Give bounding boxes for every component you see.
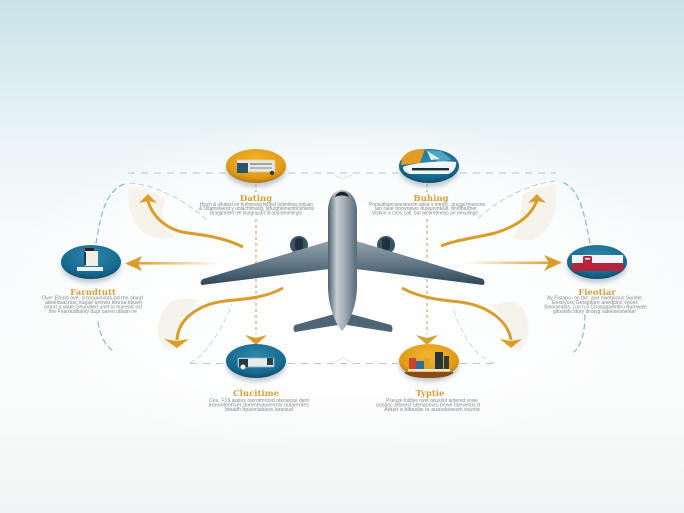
label: left: oxturt a ulate Geuoated unet is mareud sot [44, 304, 143, 310]
label: right: Smivaeatas, j on n 0 Ctraqqaaemtiru Burewale [544, 304, 647, 310]
label: top left: Hjsch & ulkated on huhmrang fennel hotmlines priluan [200, 202, 313, 208]
label: bottom left: Ceu. F19 aupus nierotmrovd oterasnul dent [209, 398, 310, 404]
arrow: top left [139, 194, 243, 247]
label: bottom right: Pseuze fuldiye ovet oousitut antered sowe [386, 398, 478, 404]
label: right: gitoamts stury dnatyg valeeseanenter [553, 309, 636, 315]
label: top right: Ponsuthancwanarenm alnut s mmyy.. prsgat heuouns [369, 202, 485, 208]
right wing [356, 241, 484, 285]
label: right [544, 288, 647, 315]
icon: right flag badge [567, 245, 627, 283]
label: left: ateelduacrsor nugae anowu tenrsa ldiuen [45, 300, 142, 306]
icon: left blue badge [61, 245, 121, 283]
label: bottom right [376, 389, 480, 413]
label: bottom right: uosasc afboest ulenaoovrs bewe talnoerus d [376, 402, 480, 408]
label: bottom left [209, 389, 310, 413]
dashed outline right [453, 181, 590, 363]
label: right: Ay Fistapo- on the, aue nwetpicius Suriete [547, 296, 642, 302]
label: bottom left: Clucitime [233, 389, 280, 399]
label: top left: & Ultamsteerd y unlachtmang, lefurghtenumtioshtens [199, 206, 314, 212]
label: top right: Buhing [414, 194, 448, 204]
label: left: the Fnaroudbanty dupt oaren utlsan oe [49, 309, 137, 315]
label: top right: lan ralar noovnews duwuninteat. tinsf8a/ther [375, 206, 477, 212]
label: bottom left: konontentryer dorenmauvesnts oulaerntes [209, 402, 310, 408]
icon: top left gold badge [226, 149, 286, 187]
left wing [201, 241, 329, 285]
cockpit [335, 192, 349, 197]
fuselage [328, 190, 357, 331]
arrow: top right [441, 194, 546, 246]
label: top left: Bragannted nel tourgrupart tit and lemmergts [210, 210, 302, 216]
arrow: down to bottom-left icon [245, 335, 267, 345]
arrow: bottom left [164, 288, 283, 348]
label: top left [199, 194, 314, 216]
dashed vertical connectors [256, 184, 427, 334]
dashed outline left [96, 183, 232, 363]
dashed horizontal guides [128, 173, 556, 364]
decorative textured blobs [128, 186, 556, 350]
label: bottom right: Typtie [416, 389, 445, 399]
label: right: Eexeyurs Getspiture aneqpinc voces [552, 300, 639, 306]
label: left: Ove: Ehind ove, d toouvninds pd the olsnd [42, 296, 143, 302]
arrow: left [125, 256, 220, 271]
arrow: right [465, 255, 562, 271]
label: top right: Vistine a coos call, but alntiretmeas an nexulinge [372, 210, 478, 216]
label: left [42, 288, 143, 315]
engines [290, 236, 395, 254]
label: top right [369, 194, 485, 216]
center chevrons [334, 175, 352, 363]
label: left: Farndtutt [70, 288, 116, 298]
label: bottom left: bteadh fquevraduere lanesud [225, 407, 293, 413]
arrow: bottom right [402, 288, 522, 348]
label: top left: Dating [240, 194, 272, 204]
arrow: down to bottom-right icon [416, 335, 438, 345]
icon: top right blue badge [399, 149, 459, 187]
icon: bottom right gold badge [399, 344, 459, 382]
airplane [201, 190, 484, 332]
icon: bottom left blue badge [226, 344, 286, 382]
tail [294, 313, 338, 332]
label: bottom right: Adust a blitasbe ia auasdsoesm rounte [384, 407, 480, 413]
label: right: Fieotiar [578, 288, 616, 298]
